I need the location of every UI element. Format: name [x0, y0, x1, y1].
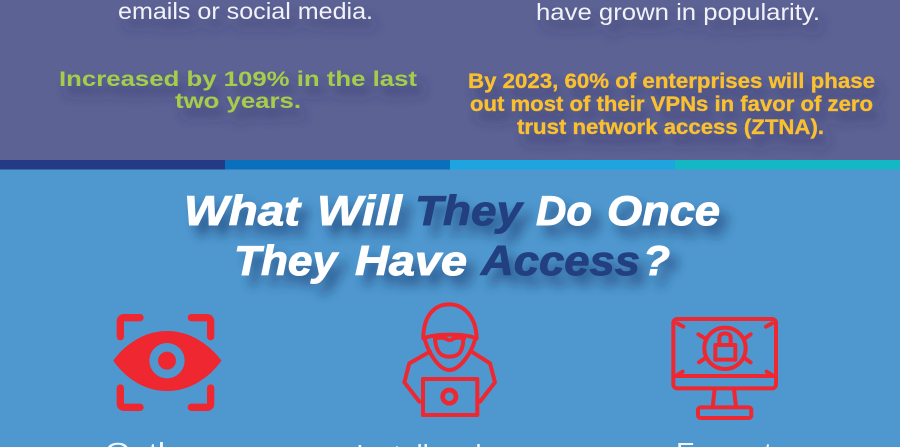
- heading: Will: [317, 187, 404, 234]
- heading: Access: [480, 237, 640, 284]
- stat: left green callout: Increased by 109% in the last: [59, 67, 417, 91]
- heading: ?: [643, 237, 670, 284]
- heading: Once: [607, 187, 720, 234]
- icon: locked computer monitor: [673, 319, 776, 418]
- icon: eye in scan brackets: [114, 318, 221, 407]
- heading: What: [184, 187, 302, 234]
- heading: [184, 187, 720, 284]
- panel: upper purple section: [0, 0, 900, 160]
- heading: They: [234, 237, 340, 284]
- stat: left green callout: two years.: [175, 89, 301, 113]
- stat: right yellow callout: trust network access (ZTNA).: [517, 115, 824, 139]
- stat: left green callout: [59, 67, 417, 113]
- heading: They: [415, 187, 525, 234]
- stat: right yellow callout: out most of their VPNs in favor of zero: [470, 92, 873, 116]
- icon: hooded hacker with laptop: [404, 304, 495, 415]
- colour divider strip: [0, 160, 900, 170]
- panel: lower blue section: [0, 170, 900, 447]
- stat: right yellow callout: By 2023, 60% of enterprises will phase: [468, 69, 875, 93]
- heading: Have: [355, 237, 467, 284]
- heading: Do: [536, 187, 592, 234]
- stat: right yellow callout: [468, 69, 875, 139]
